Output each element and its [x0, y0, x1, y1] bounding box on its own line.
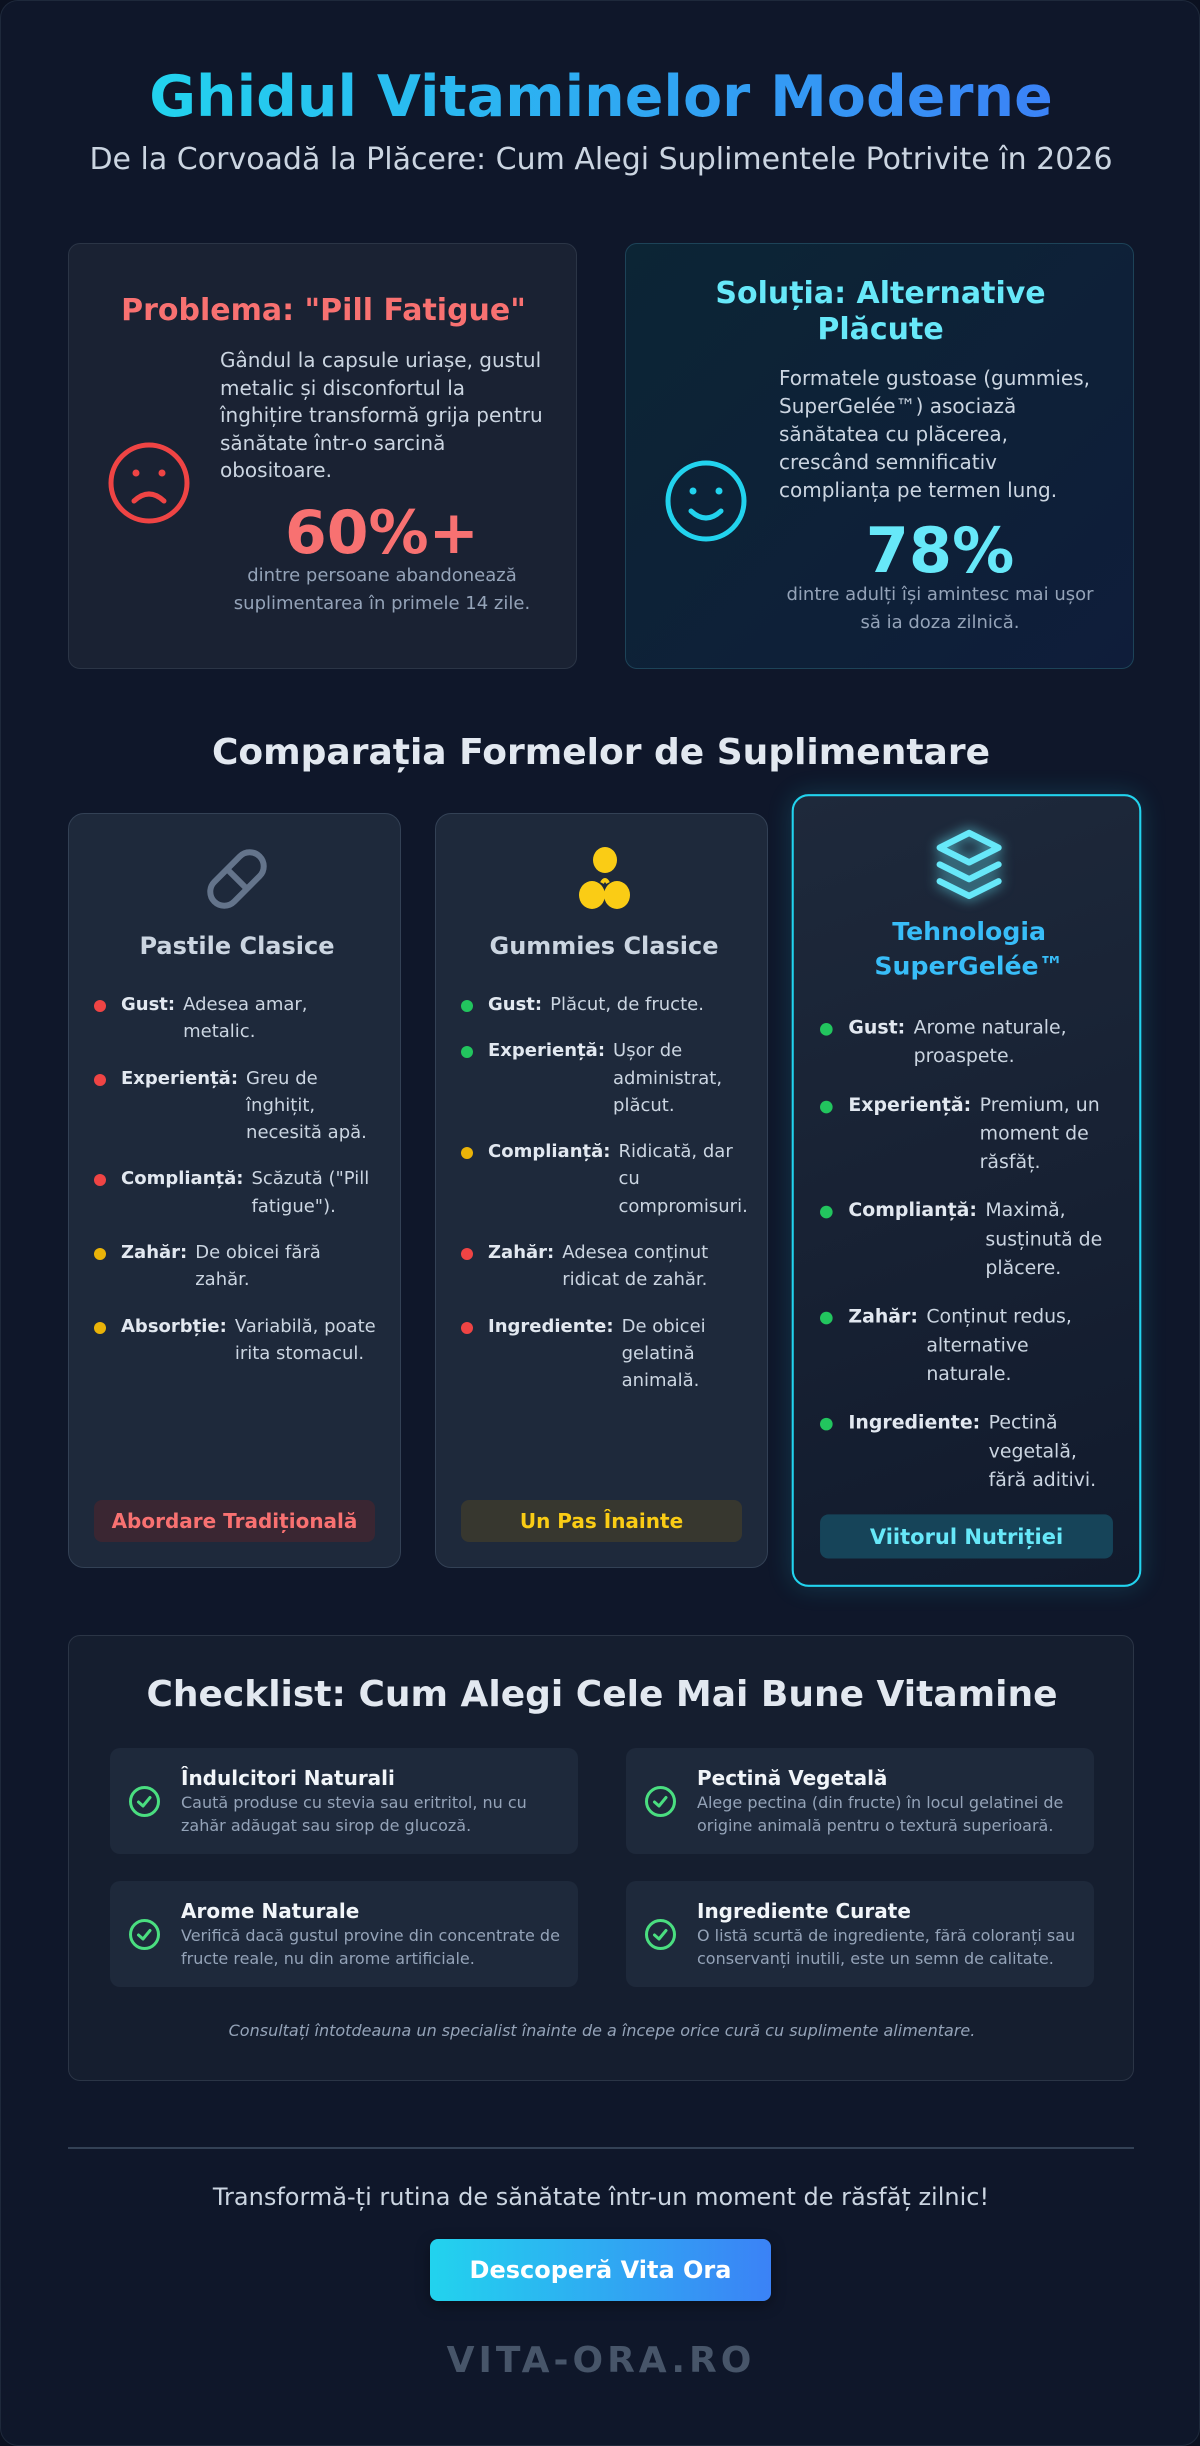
icon: gummies [579, 847, 630, 909]
panel: gummies clasice: Experiență: [488, 1040, 605, 1061]
panel: supergelee: Gust: [848, 1017, 905, 1039]
panel: supergelee: Zahăr: [848, 1306, 918, 1328]
disclaimer note: Consultați întotdeauna un specialist înainte de a începe orice cură cu suplimente alimentare. [229, 2021, 975, 2040]
panel: checklist [68, 1635, 1134, 2081]
panel: gummies clasice: Gust: [488, 994, 542, 1015]
panel: solution [625, 243, 1134, 669]
badge: Viitorul Nutriției [870, 1524, 1063, 1549]
panel: pastile clasice [68, 813, 401, 1568]
panel: supergelee: Ingrediente: [848, 1412, 980, 1434]
check item: arome: Arome Naturale [181, 1899, 359, 1923]
panel: supergelee: Premium, un moment de răsfăț. [980, 1094, 1100, 1173]
panel: gummies clasice: Plăcut, de fructe. [550, 994, 704, 1015]
check item: pectina [626, 1748, 1094, 1854]
panel: gummies clasice: Ușor de administrat, plăcut. [613, 1040, 722, 1116]
section heading: comparison: Comparația Formelor de Suplimentare [212, 732, 990, 773]
stat: 78%: 78% [866, 514, 1014, 587]
icon: layers [930, 822, 1008, 907]
panel: pastile clasice: Experiență: [121, 1068, 238, 1089]
panel: pastile clasice: Zahăr: [121, 1242, 187, 1263]
subtitle: De la Corvoadă la Plăcere: Cum Alegi Suplimentele Potrivite în 2026 [89, 142, 1113, 177]
solution heading: Soluția: Alternative Plăcute [715, 276, 1046, 347]
panel: supergelee: Conținut redus, alternative naturale. [926, 1306, 1072, 1385]
solution text: Formatele gustoase (gummies, SuperGelée™) asociază sănătatea cu plăcerea, crescând semnificativ complianța pe termen lung. [779, 366, 1090, 502]
panel: pastile clasice: De obicei fără zahăr. [195, 1242, 321, 1290]
icon: happy face [666, 460, 746, 542]
panel: gummies clasice [435, 813, 768, 1568]
panel: gummies clasice: Complianță: [488, 1141, 610, 1162]
cta text: Transformă-ți rutina de sănătate într-un moment de răsfăț zilnic! [213, 2183, 989, 2211]
icon: pill [207, 849, 267, 909]
panel: pastile clasice: Pastile Clasice [139, 932, 335, 960]
cta button: Descoperă Vita Ora [470, 2256, 731, 2284]
panel: supergelee: Maximă, susținută de plăcere. [985, 1200, 1102, 1279]
cta button [430, 2239, 771, 2301]
badge [94, 1500, 375, 1542]
panel: supergelee: Pectină vegetală, fără aditivi. [989, 1412, 1096, 1491]
stat caption: dintre persoane abandonează suplimentarea în primele 14 zile. [234, 565, 530, 614]
panel: supergelee: Experiență: [848, 1094, 971, 1116]
check item: ingrediente: Ingrediente Curate [697, 1899, 911, 1923]
panel: pastile clasice: Scăzută ("Pill fatigue"). [251, 1168, 369, 1217]
check item: arome [110, 1881, 578, 1987]
panel: problem [68, 243, 577, 669]
panel: supergelee [792, 794, 1141, 1587]
check item: indulcitori [110, 1748, 578, 1854]
panel: gummies clasice: Adesea conținut ridicat de zahăr. [562, 1242, 708, 1290]
panel: pastile clasice: Gust: [121, 994, 175, 1015]
panel: pastile clasice: Adesea amar, metalic. [183, 994, 308, 1042]
icon: sad face [108, 442, 190, 524]
check item: ingrediente: O listă scurtă de ingrediente, fără coloranți sau conservanți inutili, este un semn de calitate. [697, 1926, 1075, 1968]
problem heading: Problema: "Pill Fatigue" [121, 293, 526, 328]
check item: pectina: Pectină Vegetală [697, 1766, 887, 1790]
panel: pastile clasice: Variabilă, poate irita stomacul. [235, 1316, 376, 1364]
check item: ingrediente [626, 1881, 1094, 1987]
badge: Un Pas Înainte [520, 1509, 683, 1533]
stat: 60%+: 60%+ [285, 498, 479, 568]
panel: supergelee: Tehnologia SuperGelée™ [874, 917, 1064, 981]
panel: supergelee: Arome naturale, proaspete. [914, 1017, 1067, 1067]
footer brand: VITA-ORA.RO [447, 2340, 755, 2381]
panel: gummies clasice: Zahăr: [488, 1242, 554, 1263]
panel: gummies clasice: De obicei gelatină animală. [622, 1316, 706, 1391]
check item: indulcitori: Îndulcitori Naturali [181, 1766, 395, 1790]
problem text: Gândul la capsule uriașe, gustul metalic și disconfortul la înghițire transformă grija pentru sănătate într-o sarcină obositoare. [220, 348, 543, 482]
panel: gummies clasice: Ingrediente: [488, 1316, 614, 1337]
badge [461, 1500, 742, 1542]
check item: indulcitori: Caută produse cu stevia sau eritritol, nu cu zahăr adăugat sau sirop de glucoză. [181, 1793, 527, 1835]
checklist heading: Checklist: Cum Alegi Cele Mai Bune Vitamine [146, 1674, 1058, 1715]
panel: supergelee: Complianță: [848, 1200, 977, 1222]
panel: gummies clasice: Ridicată, dar cu compromisuri. [618, 1141, 748, 1217]
badge [820, 1515, 1113, 1559]
stat caption: dintre adulți își amintesc mai ușor să ia doza zilnică. [786, 584, 1094, 633]
badge: Abordare Tradițională [112, 1509, 357, 1533]
check item: pectina: Alege pectina (din fructe) în locul gelatinei de origine animală pentru o textură superioară. [697, 1793, 1063, 1835]
title: Ghidul Vitaminelor Moderne [149, 64, 1053, 130]
panel: gummies clasice: Gummies Clasice [490, 932, 718, 960]
panel: pastile clasice: Complianță: [121, 1168, 243, 1189]
panel: pastile clasice: Greu de înghițit, necesită apă. [246, 1068, 367, 1143]
panel: pastile clasice: Absorbție: [121, 1316, 227, 1337]
check item: arome: Verifică dacă gustul provine din concentrate de fructe reale, nu din arome artificiale. [181, 1926, 560, 1968]
